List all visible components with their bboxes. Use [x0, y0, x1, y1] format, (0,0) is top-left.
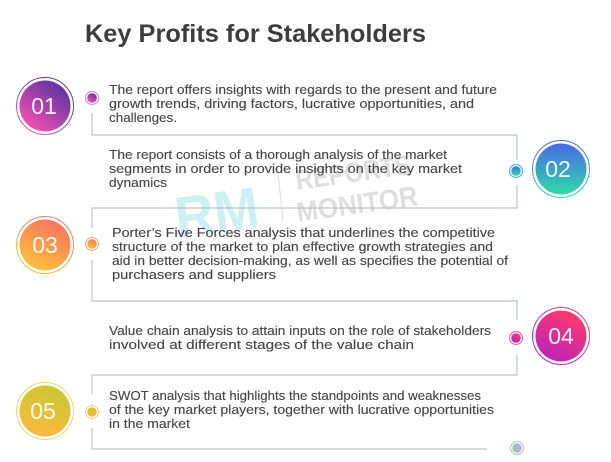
step 04 badge: 04: [548, 323, 574, 349]
connector lines: [92, 113, 517, 449]
step 05 text: SWOT analysis that highlights the standpoints and weaknesses: [109, 389, 481, 403]
step 02 dot: [510, 164, 522, 178]
step 03 text: Porter’s Five Forces analysis that underlines the competitive: [112, 226, 495, 240]
step 03 dot: [86, 238, 98, 250]
step 01 badge: [16, 78, 74, 134]
watermark logo: [171, 149, 420, 251]
step 02 text: segments in order to provide insights on the key market: [109, 162, 463, 176]
step 01 text: [109, 83, 497, 125]
step 03 text: purchasers and suppliers: [112, 268, 276, 282]
step 04 text: involved at different stages of the value chain: [109, 338, 414, 352]
end dot: [510, 442, 524, 454]
step 02 text: The report consists of a thorough analysis of the market: [109, 148, 448, 162]
title: Key Profits for Stakeholders: [85, 20, 426, 48]
step 03 badge: [16, 216, 74, 274]
watermark logo: RM: [171, 175, 263, 251]
step 04 dot: [510, 332, 522, 344]
step 05 text: of the key market players, together with lucrative opportunities: [109, 403, 494, 417]
step 01 dot: [86, 92, 98, 104]
step 01 text: The report offers insights with regards to the present and future: [109, 83, 497, 97]
step 02 badge: 02: [545, 156, 571, 182]
step 03 text: structure of the market to plan effective growth strategies and: [112, 240, 493, 254]
step 02 text: dynamics: [109, 176, 167, 190]
step 02 text: [109, 148, 463, 190]
step 05 dot: [86, 406, 98, 418]
step 05 text: [109, 389, 494, 431]
step 05 badge: [16, 382, 74, 440]
step 01 text: growth trends, driving factors, lucrative opportunities, and: [109, 97, 474, 111]
step 04 text: [109, 324, 491, 352]
watermark logo: MONITOR: [295, 180, 420, 228]
step 05 badge: 05: [30, 398, 56, 424]
step 03 badge: 03: [32, 232, 58, 258]
step 02 badge: [532, 140, 590, 198]
step 01 badge: 01: [31, 93, 57, 119]
step 01 text: challenges.: [109, 111, 177, 125]
step 03 text: [112, 226, 509, 282]
step 04 text: Value chain analysis to attain inputs on the role of stakeholders: [109, 324, 491, 338]
watermark logo: REPORTS: [294, 149, 413, 196]
step 05 text: in the market: [109, 417, 191, 431]
step 04 badge: [532, 308, 590, 364]
step 03 text: aid in better decision-making, as well as specifies the potential of: [112, 254, 509, 268]
